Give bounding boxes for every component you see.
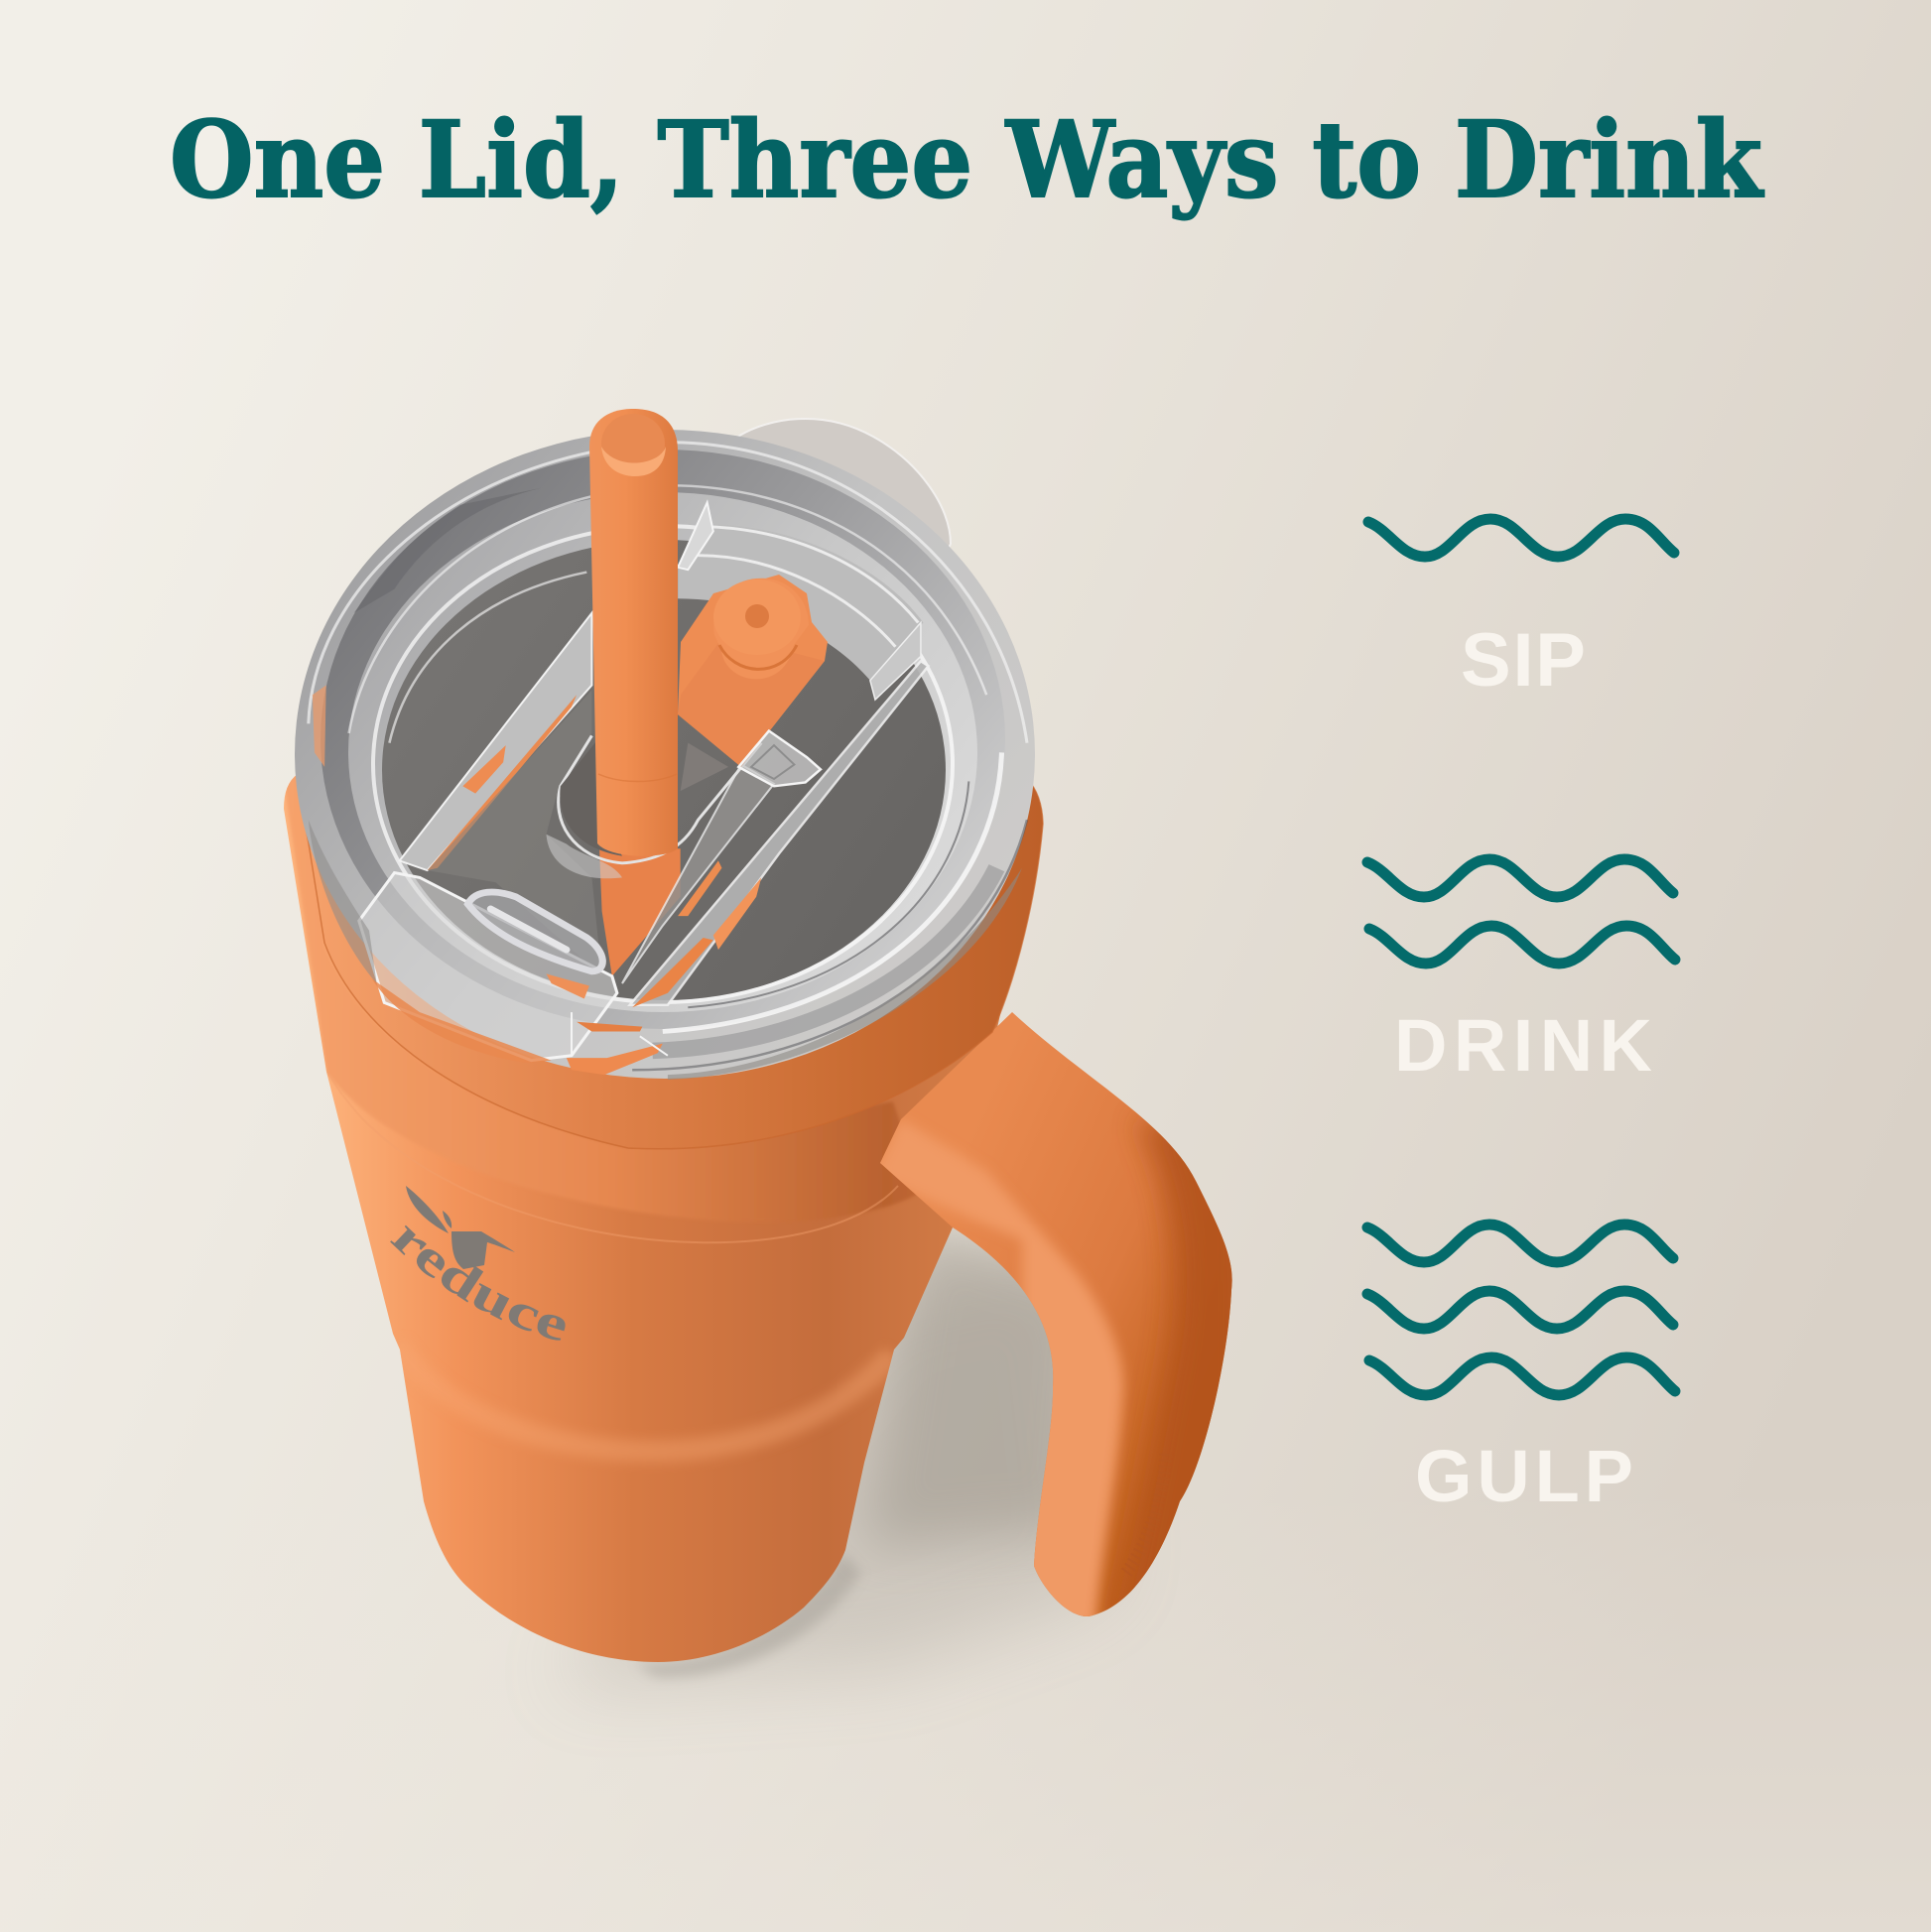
wave icon: sip: [1368, 519, 1674, 557]
collar: [298, 779, 1043, 1149]
straw: [589, 409, 678, 856]
lid well: [382, 540, 946, 1000]
orange reflections: [546, 973, 589, 999]
silicone pad: [467, 892, 602, 971]
shoulder band: [283, 774, 923, 1222]
callout: sip: [1368, 519, 1674, 703]
lid highlights: [309, 443, 1027, 743]
lid: [295, 419, 1035, 1080]
right channel rail: [630, 661, 929, 1005]
hinge clip: [738, 731, 821, 786]
straw reflection: [599, 848, 681, 976]
center channel panel: [428, 690, 602, 976]
handle: [873, 1012, 1250, 1627]
title: One Lid, Three Ways to Drink: [170, 97, 1764, 221]
straight channel rails: [400, 613, 591, 870]
flip hump: [359, 873, 617, 1061]
lid tab: [736, 419, 951, 561]
logo: reduce: reduce: [390, 1224, 566, 1341]
callout: gulp: [1367, 1224, 1675, 1517]
straw opening: [559, 735, 761, 863]
label: SIP: SIP: [1461, 618, 1586, 703]
silicone stopper: [678, 575, 828, 767]
label: GULP: GULP: [1415, 1435, 1633, 1517]
upper right glass bands: [678, 524, 923, 681]
wave icon: drink: [1367, 859, 1675, 964]
tumbler body: [283, 774, 1043, 1662]
label: DRINK: DRINK: [1394, 1004, 1652, 1087]
embossed handle mark: [1126, 1454, 1166, 1573]
lid outer ring: [295, 430, 1035, 1079]
callout: drink: [1367, 859, 1675, 1087]
tumbler shadow: [556, 1221, 1111, 1687]
wave icon: gulp: [1367, 1224, 1675, 1395]
